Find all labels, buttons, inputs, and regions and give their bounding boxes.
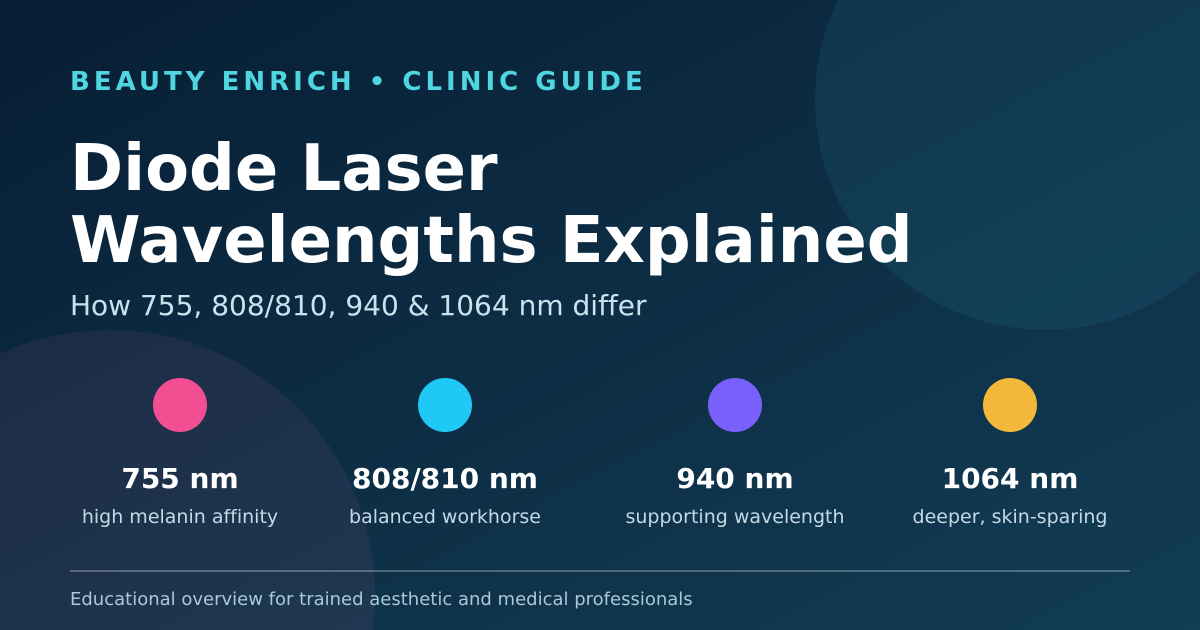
subtitle: How 755, 808/810, 940 & 1064 nm differ <box>70 289 647 322</box>
decorative circle: top right <box>815 0 1200 330</box>
description: 940 nm: supporting wavelength <box>625 506 845 528</box>
wavelength: 755 nm <box>82 378 278 528</box>
description: 808/810 nm: balanced workhorse <box>349 506 541 528</box>
description: 755 nm: high melanin affinity <box>82 506 278 528</box>
icon: pink dot <box>153 378 207 432</box>
description: 1064 nm: deeper, skin-sparing <box>913 506 1107 528</box>
wavelength: 1064 nm <box>913 378 1107 528</box>
label: 755 nm: 755 nm <box>121 462 239 495</box>
eyebrow: BEAUTY ENRICH • CLINIC GUIDE <box>70 67 647 97</box>
decorative circle: bottom left <box>0 330 375 630</box>
title <box>70 132 913 278</box>
label: 1064 nm: 1064 nm <box>942 462 1078 495</box>
title: Diode Laser <box>70 132 498 206</box>
icon: cyan dot <box>418 378 472 432</box>
icon: violet dot <box>708 378 762 432</box>
label: 808/810 nm: 808/810 nm <box>352 462 538 495</box>
icon: amber dot <box>983 378 1037 432</box>
label: 940 nm: 940 nm <box>676 462 794 495</box>
footer note: Educational overview for trained aesthetic and medical professionals <box>70 589 693 610</box>
title: Wavelengths Explained <box>70 204 913 278</box>
wavelength: 940 nm <box>625 378 845 528</box>
wavelength: 808/810 nm <box>349 378 541 528</box>
